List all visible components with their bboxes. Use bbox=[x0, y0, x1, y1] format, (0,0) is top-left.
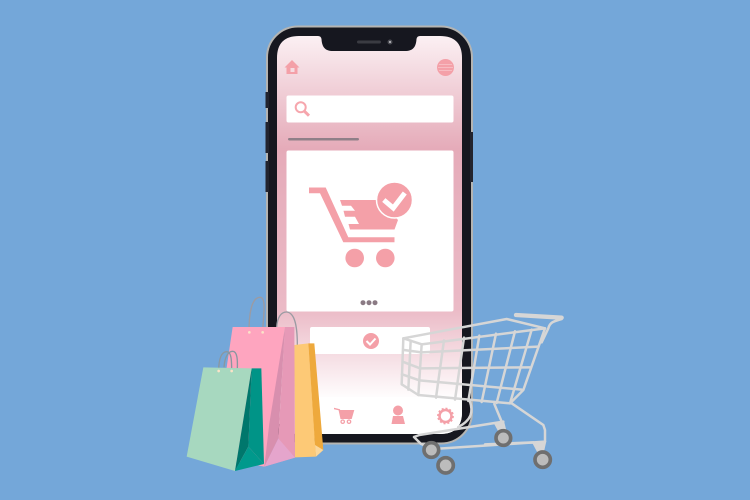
icon: search bbox=[296, 102, 309, 116]
confirm button bbox=[310, 327, 430, 354]
phone bbox=[266, 26, 473, 444]
icon: home bbox=[284, 60, 300, 74]
cart basket wires bbox=[402, 319, 545, 403]
phone side buttons bbox=[266, 92, 473, 192]
cart wheel mounts bbox=[423, 421, 545, 453]
icon: nav cart bbox=[334, 408, 354, 423]
phone screen bbox=[277, 36, 462, 434]
cart handle bbox=[516, 315, 562, 342]
yellow bag bbox=[294, 343, 323, 457]
icon: nav person bbox=[392, 406, 405, 424]
heading line bbox=[288, 138, 359, 140]
pink bag bbox=[213, 327, 295, 467]
pink bag handles bbox=[249, 297, 297, 345]
speaker and camera bbox=[357, 40, 392, 44]
shopping cart bbox=[402, 315, 562, 473]
search bar bbox=[286, 96, 454, 122]
green bag bbox=[187, 367, 264, 471]
icon: nav gear bbox=[438, 408, 453, 424]
cart wheels bbox=[424, 431, 550, 473]
main card bbox=[286, 150, 454, 312]
shopping bags bbox=[187, 297, 323, 471]
icon: menu bbox=[437, 59, 454, 76]
icon: cart with check bbox=[309, 182, 412, 267]
pagination dots bbox=[360, 300, 378, 305]
bottom navigation bbox=[277, 397, 462, 434]
green bag handles bbox=[219, 351, 237, 371]
phone body bbox=[267, 26, 472, 444]
cart undercarriage bbox=[414, 402, 545, 452]
